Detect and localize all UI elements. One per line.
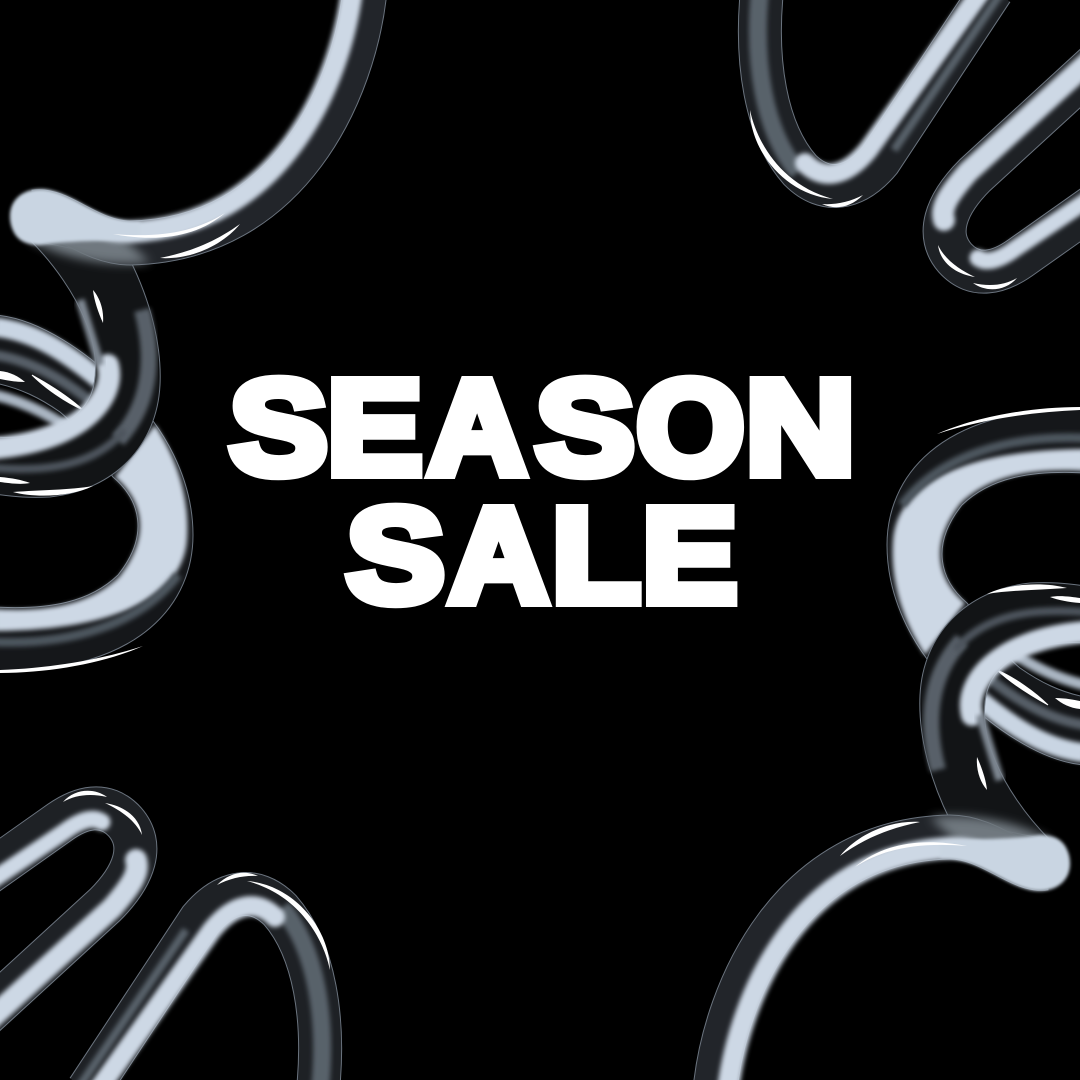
headline line 1: SEASON: N [746,353,855,503]
headline line 2: SALE: S [346,481,445,630]
headline line 1: SEASON: O [636,352,744,502]
headline line 1: SEASON: A [428,352,526,502]
headline line 1: SEASON [230,352,855,503]
headline line 1: SEASON: E [327,353,422,503]
headline line 1: SEASON: S [230,353,328,502]
headline line 2: SALE [346,480,737,631]
headline line 1: SEASON: S [536,352,635,502]
headline line 2: SALE: L [552,481,640,630]
bottom-left chrome paperclip cluster [0,791,330,1080]
headline line 2: SALE: E [642,481,737,631]
bottom-right chrome loop cluster [715,407,1080,1080]
top-right chrome paperclip cluster [750,0,1080,289]
top-left chrome loop cluster [0,0,365,673]
title: Season Sale [230,352,855,631]
headline line 2: SALE: A [449,480,548,630]
